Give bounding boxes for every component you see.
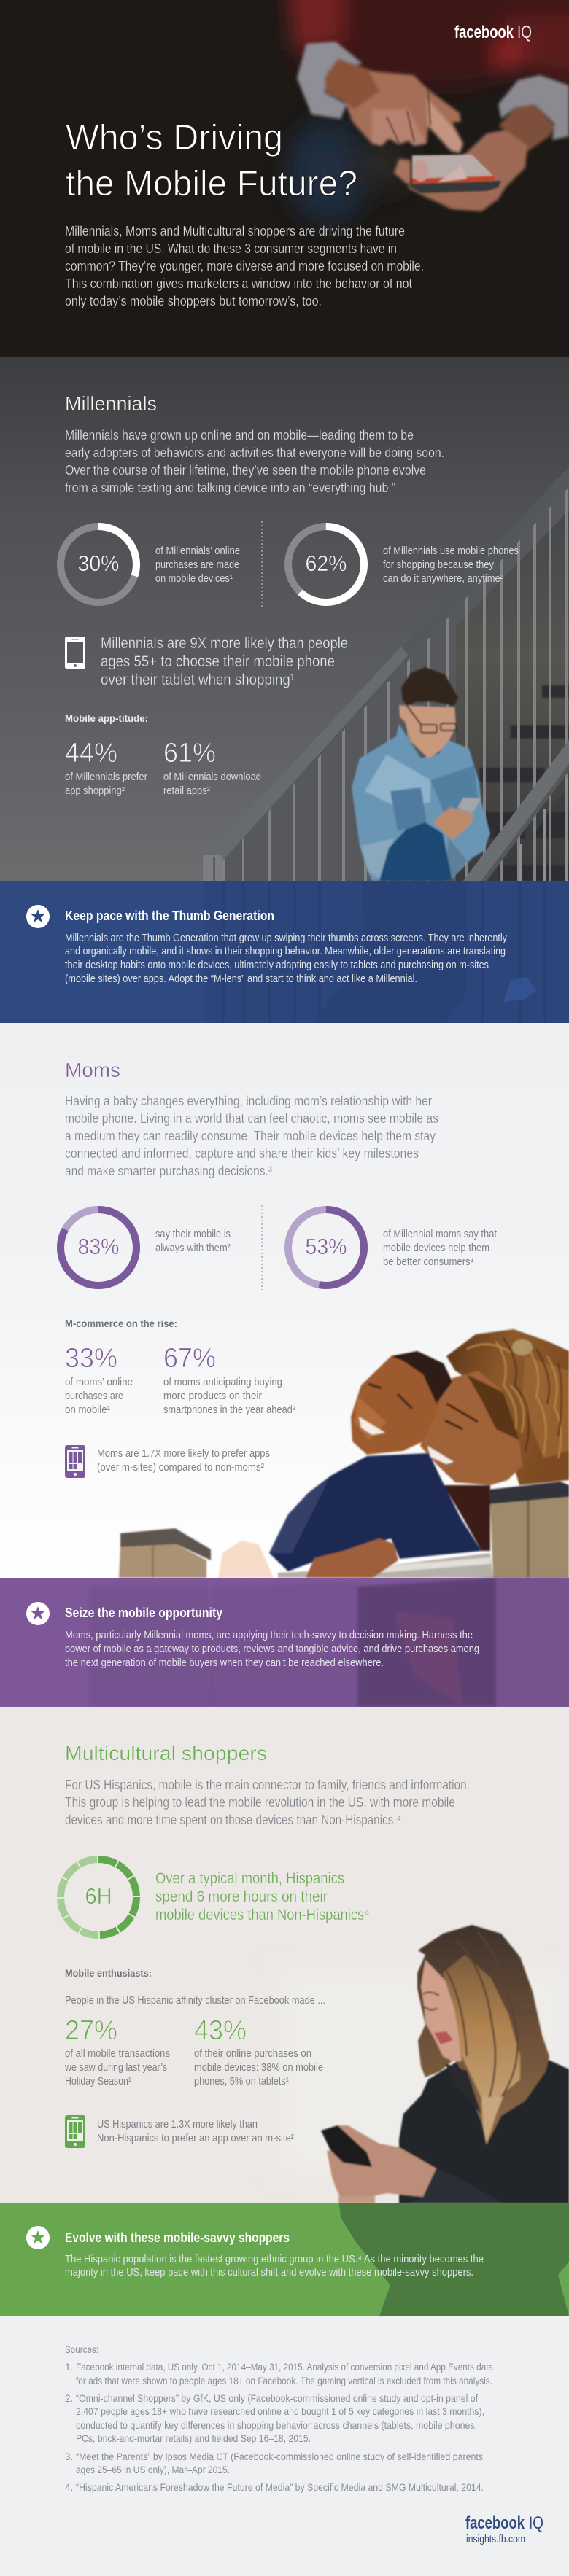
title: [66, 118, 357, 203]
icon: star: [26, 2226, 50, 2249]
ring chart: 53%: 53%: [305, 1234, 347, 1259]
stat caption: better consumers: of Millennial moms say that: [383, 1229, 497, 1240]
stat: 43%: [194, 2015, 323, 2087]
stat caption: better consumers: [383, 1229, 497, 1268]
stat: 44%: [65, 738, 147, 797]
stat: 61%: retail apps²: [163, 785, 210, 797]
sources list: 2.: [65, 2393, 73, 2404]
icon: phone with apps, purple: [65, 1445, 85, 1478]
callout: 9X more likely: [101, 635, 348, 688]
stat caption: always with them: always with them²: [155, 1242, 231, 1254]
stat: 33%: on mobile¹: [65, 1404, 110, 1416]
sources list: 1.: [65, 2362, 73, 2373]
body text: [65, 428, 444, 495]
band heading: Seize the mobile opportunity: [65, 1606, 222, 1620]
body text: Over the course of their lifetime, they’ve seen the mobile phone evolve: [65, 463, 426, 478]
body text: [65, 1094, 438, 1178]
stat caption: online purchases: [155, 545, 240, 585]
body text: early adopters of behaviors and activities that everyone will be doing soon.: [65, 445, 444, 460]
stat: 27%: Holiday Season¹: [65, 2076, 131, 2087]
band heading: Keep pace with the Thumb Generation: [65, 908, 274, 923]
sources list: “Meet the Parents” by Ipsos Media CT (Facebook-commissioned online study of self-identified parents: [76, 2451, 483, 2462]
sources list: 3.: [65, 2451, 73, 2462]
stat: 33%: of moms’ online: [65, 1377, 133, 1388]
ring chart: 62%: [288, 526, 364, 602]
band text: their desktop habits onto mobile devices, ultimately adapting easily to tablets and purchasing on m-sites: [65, 960, 489, 971]
ring chart: 83%: [61, 1210, 136, 1285]
sources list: 2,407 people ages 18+ who have researched online and bought 1 of 5 key categories in last 3 months),: [76, 2406, 484, 2417]
callout: 9X more likely: over their tablet when shopping¹: [101, 672, 295, 688]
logo: facebook IQ, footer: insights.fb.com: [466, 2533, 525, 2545]
callout: 1.7X apps: Moms are 1.7X more likely to prefer apps: [97, 1448, 270, 1460]
logo: facebook IQ, footer: [465, 2513, 543, 2545]
callout: 6 more hours: Over a typical month, Hispanics: [155, 1870, 344, 1887]
sources list: conducted to quantify key differences in shopping behavior across channels (tablets, mobile phones,: [76, 2420, 477, 2431]
sources list: Facebook internal data, US only, Oct 1, 2014–May 31, 2015. Analysis of conversion pixel and App Events data: [76, 2362, 493, 2373]
sources list: “Omni-channel Shoppers” by GfK, US only (Facebook-commissioned online study and opt-in panel of: [76, 2393, 478, 2404]
left cuff: [297, 42, 363, 119]
stat caption: anywhere anytime: [383, 545, 519, 585]
stat: 67%: smartphones in the year ahead²: [163, 1404, 295, 1416]
stat: 27%: we saw during last year’s: [64, 2062, 167, 2074]
intro text: This combination gives marketers a window into the behavior of not: [65, 276, 412, 291]
stat: 61%: 61%: [163, 738, 216, 768]
band text: and organically mobile, and it shows in their shopping behavior. Meanwhile, older generations are translating: [65, 946, 506, 957]
stat: 44%: 44%: [65, 738, 117, 768]
body text: For US Hispanics, mobile is the main connector to family, friends and information.: [65, 1778, 470, 1792]
intro text: [65, 224, 424, 308]
sources list: “Hispanic Americans Foreshadow the Future of Media” by Specific Media and SMG Multicultural, 2014.: [76, 2482, 484, 2493]
subheading: Mobile enthusiasts: Mobile enthusiasts:: [65, 1967, 152, 1979]
body text: Having a baby changes everything, including mom’s relationship with her: [65, 1094, 432, 1108]
callout: 1.3X apps: [97, 2119, 294, 2144]
panel: Moms: [0, 1023, 569, 1578]
lead-in text: People in the US Hispanic affinity cluster on Facebook made ...: [65, 1995, 325, 2007]
sources list: ages 25–65 in US only), Mar–Apr 2015.: [76, 2464, 230, 2475]
stat: 67%: 67%: [163, 1343, 216, 1374]
callout: 6 more hours: mobile devices than Non-Hispanics⁴: [155, 1907, 370, 1923]
stat: 43%: mobile devices: 38% on mobile: [194, 2062, 323, 2074]
stat: 43%: of their online purchases on: [194, 2048, 311, 2060]
stat: 27%: of all mobile transactions: [65, 2048, 170, 2060]
intro text: common? They’re younger, more diverse and more focused on mobile.: [65, 259, 424, 273]
body text: from a simple texting and talking device into an “everything hub.”: [65, 480, 395, 495]
logo: facebook IQ, footer: IQ: [529, 2513, 543, 2533]
ring chart: 83%: 83%: [77, 1234, 120, 1259]
stat caption: anywhere anytime: for shopping because they: [383, 559, 495, 571]
callout: 1.3X apps: US Hispanics are 1.3X more likely than: [97, 2119, 258, 2131]
ring chart: 62%: 62%: [305, 550, 347, 576]
logo: facebook IQ: IQ: [517, 23, 532, 42]
title: Who’s Driving: [66, 118, 283, 157]
icon: phone: [65, 637, 85, 669]
body text: mobile phone. Living in a world that can feel chaotic, moms see mobile as: [65, 1111, 438, 1126]
heading: Moms: Moms: [65, 1059, 120, 1081]
stat caption: anywhere anytime: of Millennials use mobile phones: [383, 545, 519, 557]
sources list: for ads that were shown to people ages 18+ on Facebook. The gaming vertical is excluded from this analysis.: [76, 2375, 492, 2386]
band text: the next generation of mobile buyers when they can’t be reached elsewhere.: [65, 1657, 384, 1669]
stat: 33%: [65, 1343, 133, 1416]
stat: 43%: phones, 5% on tablets¹: [194, 2076, 289, 2087]
stat: 33%: purchases are: [65, 1390, 123, 1402]
subheading: M-commerce: M-commerce on the rise:: [65, 1318, 177, 1329]
photo: woman with phone: [277, 1925, 569, 2203]
stat: 61%: [163, 738, 261, 797]
band text: [65, 2254, 484, 2279]
panel: footer: [0, 2316, 569, 2576]
stat: 33%: 33%: [65, 1343, 117, 1374]
panel: blue takeaway band: [0, 881, 569, 1023]
intro text: of mobile in the US. What do these 3 consumer segments have in: [65, 241, 397, 256]
body text: a medium they can readily consume. Their mobile devices help them stay: [65, 1129, 436, 1143]
stat caption: online purchases: of Millennials’ online: [155, 545, 240, 557]
band text: [65, 1630, 479, 1669]
callout: 9X more likely: Millennials are 9X more likely than people: [101, 635, 348, 652]
body text: devices and more time spent on those devices than Non-Hispanics.⁴: [65, 1813, 401, 1827]
stat caption: better consumers: be better consumers³: [383, 1256, 473, 1268]
stat caption: always with them: [155, 1229, 231, 1254]
body text: This group is helping to lead the mobile revolution in the US, with more mobile: [65, 1795, 455, 1810]
heading: Millennials: Millennials: [65, 392, 157, 415]
title: the Mobile Future?: [66, 164, 357, 203]
stat caption: online purchases: purchases are made: [155, 559, 239, 571]
band text: majority in the US, keep pace with this cultural shift and evolve with these mobile-savvy shoppers.: [65, 2267, 473, 2279]
band text: power of mobile as a gateway to products, reviews and tangible advice, and drive purchases among: [65, 1643, 479, 1655]
ring chart: 53%: [288, 1210, 364, 1285]
callout: 9X more likely: ages 55+ to choose their mobile phone: [101, 653, 335, 670]
stat caption: better consumers: mobile devices help them: [383, 1242, 489, 1254]
icon: star: [26, 905, 50, 928]
panel: Multicultural shoppers: [0, 1707, 569, 2203]
callout: 1.7X apps: (over m-sites) compared to non-moms²: [97, 1462, 264, 1474]
stat: 27%: 27%: [65, 2015, 117, 2046]
sources list: PCs, brick-and-mortar retails) and fielded Sep 16–18, 2015.: [76, 2433, 311, 2444]
stat: 44%: of Millennials prefer: [65, 771, 147, 783]
stat caption: always with them: say their mobile is: [155, 1229, 231, 1240]
stat: 67%: of moms anticipating buying: [163, 1377, 282, 1388]
body text: connected and informed, capture and share their kids’ key milestones: [65, 1146, 419, 1161]
photo: hands holding phone: [276, 0, 569, 237]
callout: 1.3X apps: Non-Hispanics to prefer an app over an m-site²: [97, 2133, 294, 2144]
stat: 61%: of Millennials download: [163, 771, 261, 783]
stat caption: online purchases: on mobile devices¹: [155, 573, 233, 585]
body text: Millennials have grown up online and on mobile—leading them to be: [65, 428, 414, 443]
ring chart: 30%: 30%: [77, 550, 120, 576]
panel: hero: [0, 0, 569, 358]
ring chart: 6H segmented: 6H: [85, 1883, 112, 1909]
stat caption: anywhere anytime: can do it anywhere, anytime²: [383, 573, 503, 585]
stat: 67%: [163, 1343, 295, 1416]
band text: Millennials are the Thumb Generation that grew up swiping their thumbs across screens. They are inherently: [65, 933, 508, 944]
band text: [65, 933, 508, 985]
intro text: Millennials, Moms and Multicultural shoppers are driving the future: [65, 224, 405, 238]
icon: star: [26, 1602, 50, 1625]
icon: phone with apps, green: [65, 2115, 85, 2148]
callout: 6 more hours: spend 6 more hours on their: [155, 1888, 328, 1905]
band text: Moms, particularly Millennial moms, are applying their tech-savvy to decision making. Harness the: [65, 1630, 473, 1641]
stat: 67%: more products on their: [163, 1390, 262, 1402]
band heading: Evolve with these mobile-savvy shoppers: [65, 2230, 290, 2245]
logo: facebook IQ, footer: facebook: [465, 2513, 525, 2533]
subheading: Mobile app-titude: Mobile app-titude:: [65, 712, 148, 724]
sources list: Sources:: [65, 2344, 98, 2355]
sources list: [65, 2344, 493, 2493]
panel: green takeaway band: [0, 2203, 569, 2316]
band text: The Hispanic population is the fastest growing ethnic group in the US.⁴ As the minority becomes the: [65, 2254, 484, 2265]
stat: 44%: app shopping²: [65, 785, 125, 797]
callout: 6 more hours: [155, 1870, 370, 1923]
intro text: only today’s mobile shoppers but tomorrow’s, too.: [65, 294, 322, 308]
panel: Millennials: [0, 357, 569, 881]
callout: 1.7X apps: [97, 1448, 270, 1474]
stat: 43%: 43%: [194, 2015, 247, 2046]
photo: man on stairs: [203, 467, 569, 881]
panel: purple takeaway band: [0, 1578, 569, 1707]
logo: facebook IQ: facebook: [454, 23, 514, 42]
stat: 27%: [64, 2015, 170, 2087]
heading: Multicultural shoppers: Multicultural shoppers: [65, 1742, 267, 1764]
photo: mother and child: [119, 1329, 569, 1578]
body text: [65, 1778, 470, 1827]
sources list: 4.: [65, 2482, 73, 2493]
body text: and make smarter purchasing decisions.³: [65, 1164, 272, 1178]
ring chart: 30%: [61, 526, 136, 602]
ring chart: 6H segmented: [61, 1859, 136, 1935]
band text: (mobile sites) over apps. Adopt the “M-lens” and start to think and act like a Millennial.: [65, 973, 417, 985]
